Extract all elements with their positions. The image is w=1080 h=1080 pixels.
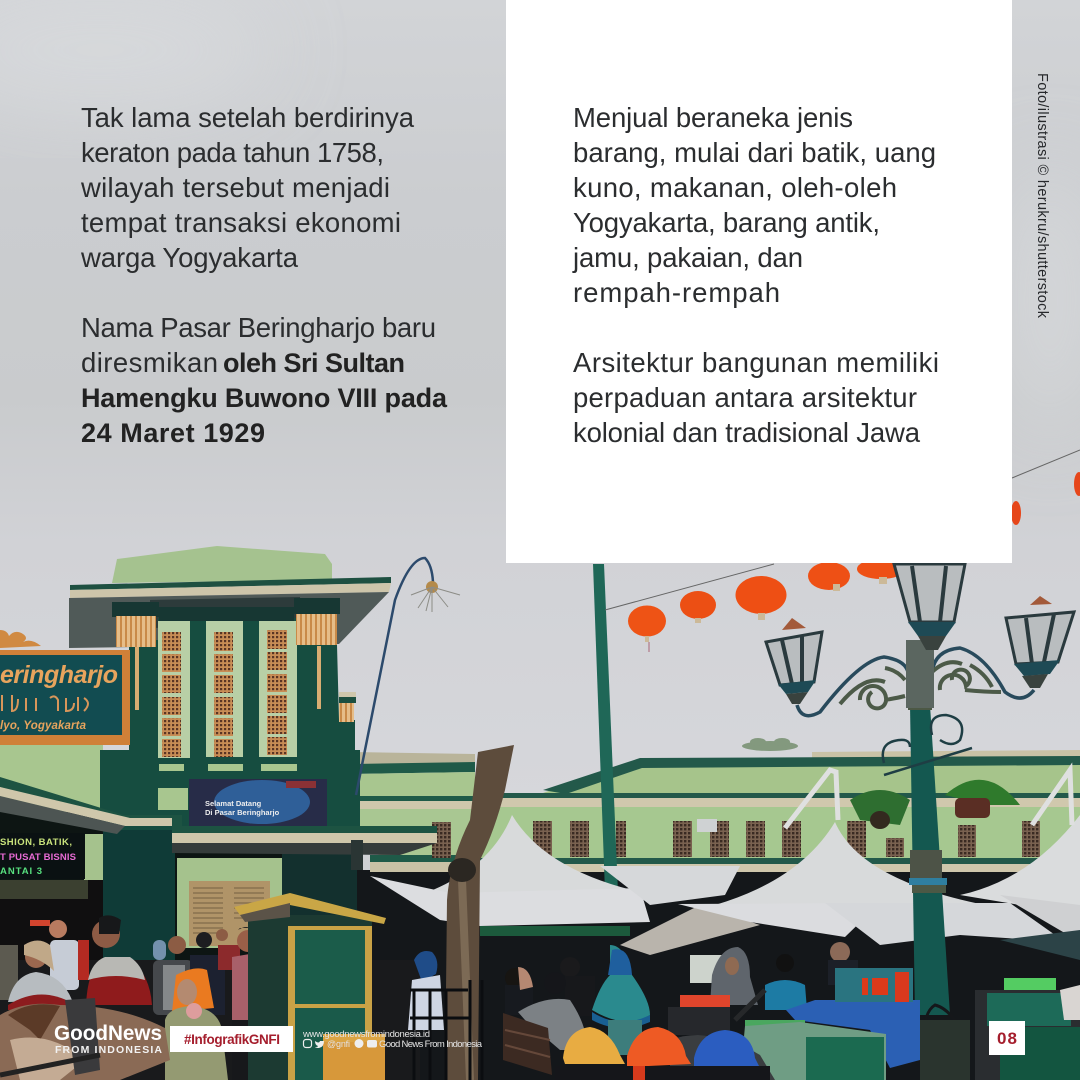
text block: history of the market: wilayah tersebut menjadi: [80, 172, 390, 203]
website and social links: www.goodnewsfromindonesia.id: [302, 1029, 430, 1040]
text block: goods and architecture: kuno, makanan, oleh-oleh: [573, 172, 897, 203]
text block: goods and architecture: Menjual beraneka jenis: [573, 102, 853, 133]
text block: history of the market: warga Yogyakarta: [80, 242, 299, 273]
background photo: market signboard: lyo, Yogyakarta: [0, 720, 87, 732]
logo: GoodNews from Indonesia: [54, 1022, 162, 1056]
background photo: crowd on the left: [0, 915, 420, 1080]
text block: goods and architecture: Arsitektur bangunan memiliki: [573, 347, 939, 378]
background photo: central crowd and bench: [503, 945, 650, 1075]
photo credit: Foto/ilustrasi © herukru/shutterstock: [1034, 73, 1050, 319]
background photo: white marquee tents: [370, 770, 1080, 955]
person: horse in foreground: [0, 998, 170, 1080]
icon: youtube: [367, 1040, 377, 1048]
background photo: green wooden kiosk: [234, 893, 386, 1080]
background photo: lower entrance awning and dark lobby: T PUSAT BISNIS: [0, 852, 76, 863]
background photo: LED welcome screen: Di Pasar Beringharjo: [205, 808, 280, 817]
hashtag label: [170, 1026, 293, 1052]
text block: history of the market: Nama Pasar Beringharjo baru: [81, 312, 436, 343]
background photo: green stall awning strip: [480, 926, 630, 936]
website and social links: [302, 1029, 483, 1050]
person: crowd behind: [153, 929, 240, 1015]
website and social links: Good News From Indonesia: [379, 1039, 483, 1050]
person: man in batik shirt: [232, 927, 280, 1080]
text block: goods and architecture: jamu, pakaian, dan: [572, 242, 803, 273]
background photo: bamboo penjor pole: [356, 558, 460, 795]
background photo: stalls on the right: [668, 930, 1080, 1080]
lamp: left: [766, 618, 822, 704]
text block: goods and architecture: kolonial dan tradisional Jawa: [573, 417, 921, 448]
logo: GoodNews from Indonesia: FROM INDONESIA: [55, 1044, 162, 1056]
text block: history of the market: diresmikan: [81, 347, 218, 378]
background photo: lower entrance awning and dark lobby: SHION, BATIK,: [0, 837, 72, 848]
person: woman with cap: [8, 940, 72, 1010]
person: man with red and white jacket: [86, 915, 152, 1005]
background photo: market signboard: eringharjo: [0, 661, 118, 689]
website and social links: @gnfi: [327, 1039, 350, 1049]
text block: history of the market: oleh Sri Sultan: [223, 348, 405, 378]
background photo: LED welcome screen: [189, 779, 327, 826]
background photo: lower entrance awning and dark lobby: ANTAI 3: [0, 866, 42, 877]
background photo: lower entrance awning and dark lobby: [0, 777, 437, 975]
background photo: red lanterns: [605, 450, 1080, 652]
text block: history of the market: keraton pada tahun 1758,: [81, 137, 384, 168]
hashtag label: #InfografikGNFI: [184, 1032, 280, 1047]
text block: goods and architecture: [572, 102, 939, 448]
background photo: fence and woman in blue hijab: [323, 951, 482, 1080]
page number: 08: [997, 1029, 1017, 1048]
background photo: ornate lamp post: [766, 564, 1074, 1015]
background photo: dry tree trunk: [445, 745, 514, 1080]
background photo: LED welcome screen: Selamat Datang: [205, 799, 262, 808]
text block: goods and architecture: rempah-rempah: [573, 277, 780, 308]
text block: history of the market: Hamengku Buwono VIII pada: [81, 383, 448, 413]
white text panel: [506, 0, 1012, 563]
lamp: right: [1006, 596, 1074, 688]
icon: instagram: [304, 1040, 312, 1048]
icon: facebook: [354, 1039, 364, 1048]
background photo: utility pole: [593, 564, 618, 892]
page number: [989, 1021, 1025, 1055]
text block: history of the market: Tak lama setelah berdirinya: [81, 102, 415, 133]
background photo: main market tower: [0, 546, 391, 850]
background photo: hanging ferns: [850, 780, 1020, 829]
background photo: right market building: [353, 750, 1080, 872]
background photo: tree tops behind building: [742, 738, 798, 751]
text block: history of the market: [80, 102, 448, 448]
background photo: cloudy sky: [0, 0, 1080, 800]
text block: goods and architecture: barang, mulai dari batik, uang: [573, 137, 936, 168]
text block: history of the market: tempat transaksi ekonomi: [81, 207, 401, 238]
icon: twitter: [315, 1041, 324, 1048]
text block: goods and architecture: Yogyakarta, barang antik,: [573, 207, 880, 238]
text block: history of the market: 24 Maret 1929: [81, 418, 265, 448]
background photo: dark stall interior: [355, 870, 1080, 1080]
person: woman with orange headscarf: [165, 968, 228, 1080]
background photo: coloured plastic bins: [555, 1027, 770, 1080]
text block: goods and architecture: perpaduan antara arsitektur: [573, 382, 917, 413]
logo: GoodNews from Indonesia: GoodNews: [54, 1022, 162, 1045]
background photo: market signboard: [0, 630, 130, 745]
lamp: top: [894, 564, 965, 650]
person: man in white t-shirt: [49, 920, 89, 990]
